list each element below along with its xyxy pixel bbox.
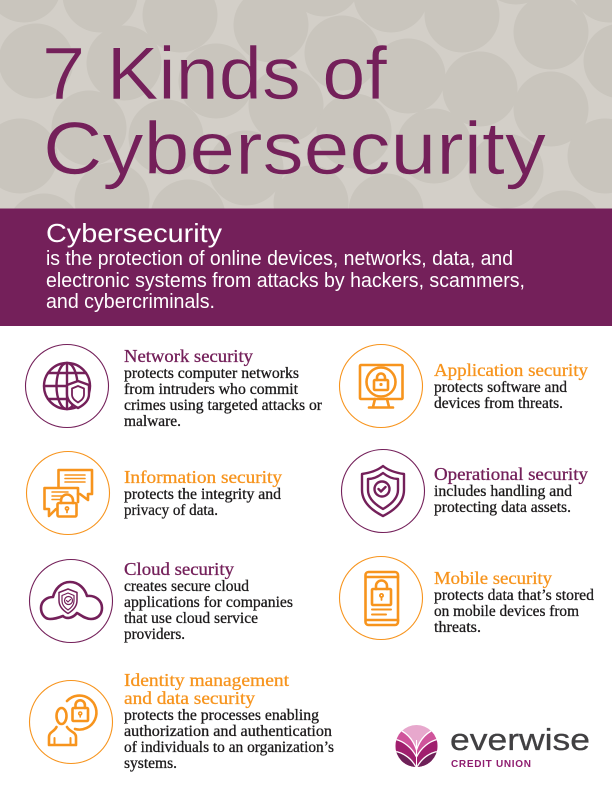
panel: mobile security [340,556,594,640]
text: cloud security: that use cloud service [124,610,258,627]
text: identity management and data security: authorization and authentication [124,723,332,740]
text: cloud security: applications for companies [124,594,293,611]
banner: definition of cybersecurity: is the protection of online devices, networks, data, and [46,248,513,270]
panel: identity management and data security [30,670,334,772]
text: mobile security: threats. [434,619,481,636]
icon: cloud with shield [30,560,112,642]
banner: definition of cybersecurity: and cybercriminals. [46,291,215,313]
icon: phone with lock [340,556,422,640]
text: network security: Network security [124,346,253,366]
banner: definition of cybersecurity: Cybersecurity [46,218,222,248]
logo: everwise credit union [396,725,589,767]
text: operational security: protecting data assets. [434,499,571,516]
text: information security: privacy of data. [124,502,218,519]
text: operational security [434,464,588,516]
text: network security: protects computer networks [124,365,299,382]
text: mobile security: Mobile security [434,568,552,588]
header background with circles [0,0,612,268]
logo: everwise credit union: CREDIT UNION [451,759,531,770]
text: information security [124,467,282,519]
text: information security: Information security [124,467,282,487]
banner: definition of cybersecurity: electronic systems from attacks by hackers, scammers, [46,270,525,292]
panel: operational security [342,450,588,532]
text: identity management and data security: and data security [124,688,255,708]
text: operational security: includes handling and [434,483,572,500]
text: mobile security: on mobile devices from [434,603,579,620]
text: application security: protects software and [434,379,567,396]
text: cloud security [124,559,293,643]
text: application security: Application security [434,360,588,380]
panel: information security [26,452,282,534]
text: cloud security: creates secure cloud [124,578,249,595]
title: 7 Kinds of [42,32,387,115]
icon: shield with check [342,450,424,532]
icon: globe with shield [26,344,108,428]
text: cloud security: providers. [124,626,185,643]
text: network security: malware. [124,413,181,430]
text: cloud security: Cloud security [124,559,234,579]
text: application security: devices from threats. [434,395,563,412]
text: network security: from intruders who commit [124,381,299,398]
icon: person with lock [30,680,112,764]
text: identity management and data security: protects the processes enabling [124,707,319,724]
icon: logo leaf mark [396,725,438,767]
panel: cloud security [30,559,293,643]
text: identity management and data security: Identity management [124,670,289,690]
text: identity management and data security: systems. [124,755,177,772]
text: mobile security: protects data that’s stored [434,587,594,604]
text: information security: protects the integrity and [124,486,281,503]
text: identity management and data security: of individuals to an organization’s [124,739,334,756]
title [42,32,546,190]
logo: everwise credit union: everwise [450,722,590,757]
panel: network security [26,344,323,430]
banner: definition of cybersecurity [0,208,612,326]
icon: monitor with lock [340,344,422,428]
text: network security: crimes using targeted attacks or [124,397,323,414]
text: identity management and data security [124,670,334,772]
text: network security [124,346,323,430]
panel: application security [340,344,588,428]
text: application security [434,360,588,412]
text: mobile security [434,568,594,636]
icon: chat bubbles with lock [26,452,110,534]
title: Cybersecurity [43,107,546,190]
text: operational security: Operational security [434,464,588,484]
